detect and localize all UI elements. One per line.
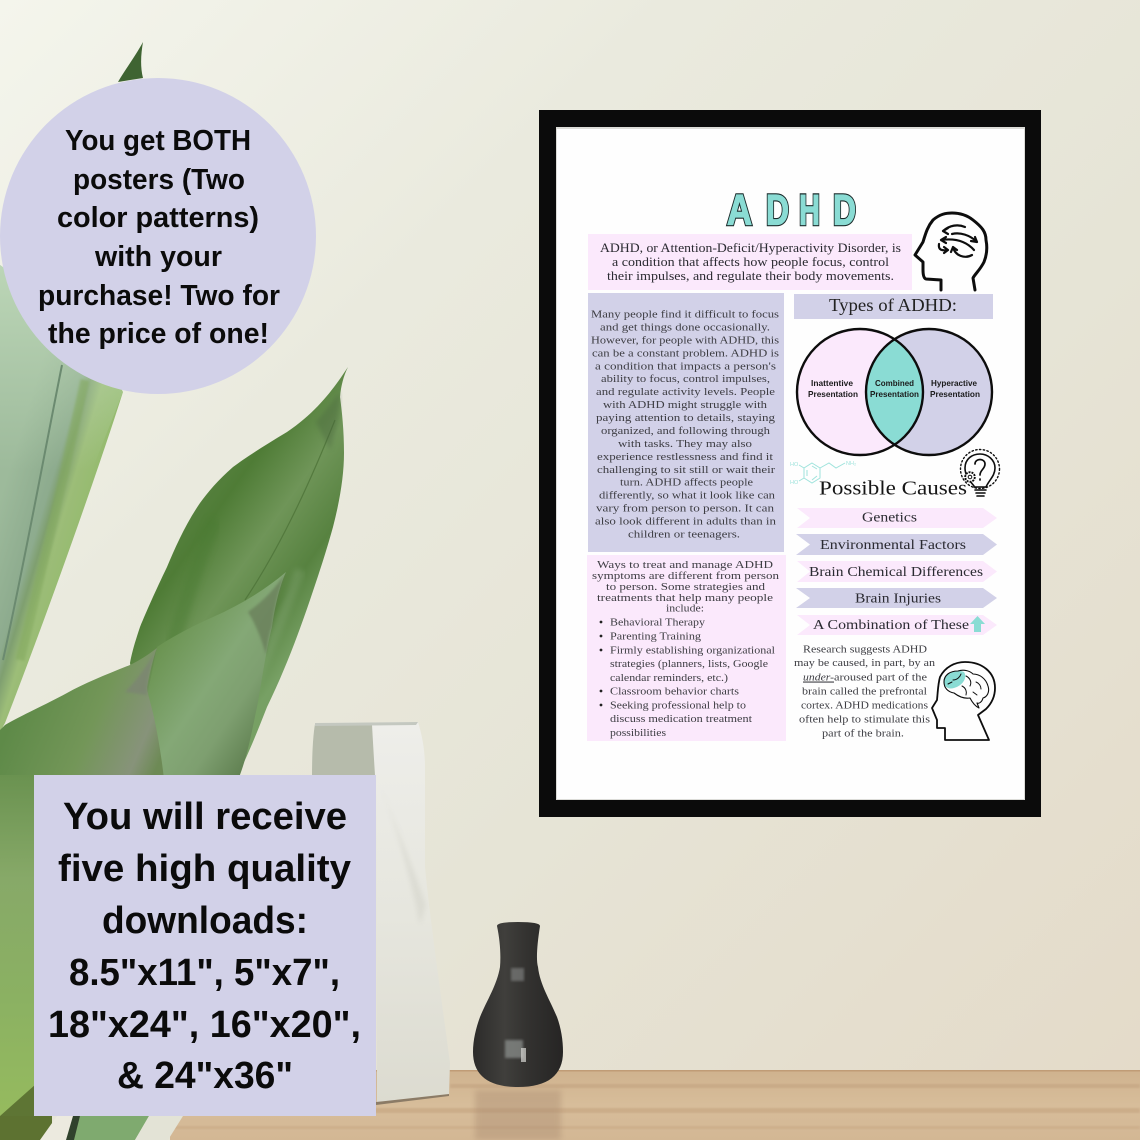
heading: types of ADHD	[794, 294, 993, 319]
cause ribbon: genetics	[797, 508, 997, 528]
callout circle: both posters: with your	[94, 241, 222, 273]
treatment list: Behavioral Therapy	[610, 616, 706, 628]
white twisted vase	[312, 722, 450, 1105]
title	[727, 186, 856, 234]
panel: description: with tasks. They may also	[618, 438, 753, 450]
icon: dopamine molecule: HO	[790, 480, 799, 486]
callout circle: both posters: purchase! Two for	[38, 280, 280, 312]
icon: light bulb with question mark	[960, 450, 1000, 496]
text block: prefrontal cortex note	[794, 644, 936, 740]
icon: head with arrows	[915, 213, 987, 290]
text block: prefrontal cortex note: often help to stimulate this	[799, 714, 930, 726]
callout panel: five downloads: 8.5"x11", 5"x7",	[69, 952, 340, 994]
venn diagram: Presentation	[870, 389, 919, 399]
panel: description: organized, and following through	[601, 425, 771, 437]
venn diagram: Presentation	[808, 389, 858, 399]
panel: description: children or teenagers.	[628, 528, 740, 540]
text block: prefrontal cortex note: part of the brain.	[822, 728, 904, 740]
treatment list: Firmly establishing organizational	[610, 644, 775, 656]
panel: treatments: to person. Some strategies and	[606, 581, 766, 593]
tall pale leaf below the circle	[0, 265, 123, 732]
icon: dopamine molecule: HO	[790, 462, 799, 468]
panel: treatments	[587, 555, 786, 741]
cause ribbon: a combination of these: A Combination of These	[813, 618, 969, 633]
picture frame	[539, 110, 1041, 817]
panel: description: paying attention to details, staying	[596, 412, 776, 424]
venn diagram: Combined	[875, 378, 914, 388]
cause ribbon: genetics: Genetics	[862, 510, 917, 526]
treatment list: possibilities	[610, 727, 666, 739]
venn diagram	[797, 329, 992, 455]
callout panel: five downloads: You will receive	[63, 796, 347, 838]
cause ribbon: brain injuries	[796, 588, 997, 608]
callout panel: five downloads: 18"x24", 16"x20",	[48, 1004, 361, 1046]
cause ribbon: environmental factors	[796, 534, 997, 555]
panel: description: However, for people with ADHD, this	[591, 334, 779, 346]
tip of tall leaf above the circle	[118, 42, 143, 82]
venn diagram: Hyperactive	[931, 378, 977, 388]
panel: treatments: symptoms are different from person	[592, 570, 780, 582]
callout panel: five downloads: downloads:	[102, 900, 308, 942]
panel: definition: their impulses, and regulate their body movements.	[607, 269, 894, 283]
panel: definition: ADHD, or Attention-Deficit/Hyperactivity Disorder, is	[600, 241, 901, 255]
icon: dopamine molecule	[790, 461, 856, 486]
poster content	[587, 186, 1000, 741]
panel: description: and get things done occasionally.	[600, 322, 770, 334]
treatment list: Parenting Training	[610, 630, 702, 642]
panel: description: a condition that impacts a person's	[595, 360, 776, 372]
title: D	[833, 186, 856, 234]
lower left leaf	[0, 648, 165, 790]
title: D	[766, 186, 789, 234]
cause ribbon: a combination of these	[797, 615, 997, 635]
icon: head with brain	[932, 662, 995, 740]
panel: description: with ADHD might struggle with	[603, 399, 768, 411]
callout circle: both posters: posters (Two	[73, 164, 245, 196]
black vase	[473, 922, 563, 1087]
title: A	[727, 186, 752, 234]
cause ribbon: brain chemical differences	[797, 561, 997, 582]
text block: prefrontal cortex note: brain called the prefrontal	[802, 686, 927, 698]
callout panel: five downloads	[34, 775, 376, 1116]
venn diagram: Inattentive	[811, 378, 853, 388]
icon: dopamine molecule: NH₂	[846, 461, 856, 467]
panel: description: ability to focus, control impulses,	[601, 373, 770, 385]
callout circle: both posters: You get BOTH	[65, 125, 251, 157]
panel: description: challenging to sit still or wait their	[597, 464, 775, 476]
panel: description: differently, so what it look like can	[599, 490, 776, 502]
treatment list: Seeking professional help to	[610, 700, 747, 712]
cause ribbon: brain injuries: Brain Injuries	[855, 592, 941, 606]
foliage below the lavender panel	[0, 1116, 183, 1140]
middle leaf	[130, 572, 286, 780]
wooden shelf	[170, 1070, 1140, 1140]
title: H	[799, 186, 820, 234]
text block: prefrontal cortex note: cortex. ADHD medications	[801, 700, 928, 712]
treatment list: discuss medication treatment	[610, 713, 752, 725]
panel: treatments: Ways to treat and manage ADHD	[597, 559, 773, 571]
panel: treatments: include:	[666, 602, 704, 614]
treatment list: Classroom behavior charts	[610, 686, 739, 698]
callout circle: both posters: color patterns)	[57, 202, 259, 234]
panel: description: experience restlessness and find it	[597, 451, 773, 463]
panel: description: can be a constant problem. ADHD is	[592, 347, 779, 359]
text block: prefrontal cortex note: may be caused, in part, by an	[794, 657, 936, 669]
title: D	[833, 186, 856, 234]
panel: description: and regulate activity levels. People	[596, 386, 775, 398]
panel: description: Many people find it difficult to focus	[591, 308, 779, 320]
heading: possible causes: Possible Causes	[819, 478, 967, 500]
cause ribbon: environmental factors: Environmental Factors	[820, 538, 966, 553]
callout panel: five downloads: & 24"x36"	[117, 1055, 293, 1097]
panel: definition: a condition that affects how people focus, control	[612, 255, 890, 269]
icon: up arrow	[970, 616, 985, 632]
callout circle: both posters: the price of one!	[48, 318, 269, 350]
heading: types of ADHD: Types of ADHD:	[829, 295, 957, 315]
panel: description: also look different in adults than in	[595, 516, 777, 528]
treatment list: calendar reminders, etc.)	[610, 672, 728, 684]
right large leaf	[130, 367, 348, 790]
callout circle: both posters	[0, 78, 316, 394]
title: D	[766, 186, 789, 234]
callout panel: five downloads: five high quality	[58, 848, 351, 890]
text block: prefrontal cortex note: Research suggests ADHD	[803, 644, 927, 656]
panel: definition	[588, 234, 912, 290]
title: A	[727, 186, 752, 234]
panel: treatments: treatments that help many people	[597, 592, 773, 604]
title: H	[799, 186, 820, 234]
text block: prefrontal cortex note: under-	[803, 672, 834, 684]
cause ribbon: brain chemical differences: Brain Chemical Differences	[809, 565, 983, 580]
panel: description	[588, 293, 784, 552]
panel: description: vary from person to person. It can	[596, 503, 775, 515]
text block: prefrontal cortex note: aroused part of the	[834, 672, 927, 684]
venn diagram: Presentation	[930, 389, 980, 399]
treatment list: strategies (planners, lists, Google	[610, 658, 768, 670]
panel: description: turn. ADHD affects people	[620, 477, 753, 489]
treatment list	[600, 616, 775, 739]
green leaf strip at left edge	[0, 775, 40, 1120]
